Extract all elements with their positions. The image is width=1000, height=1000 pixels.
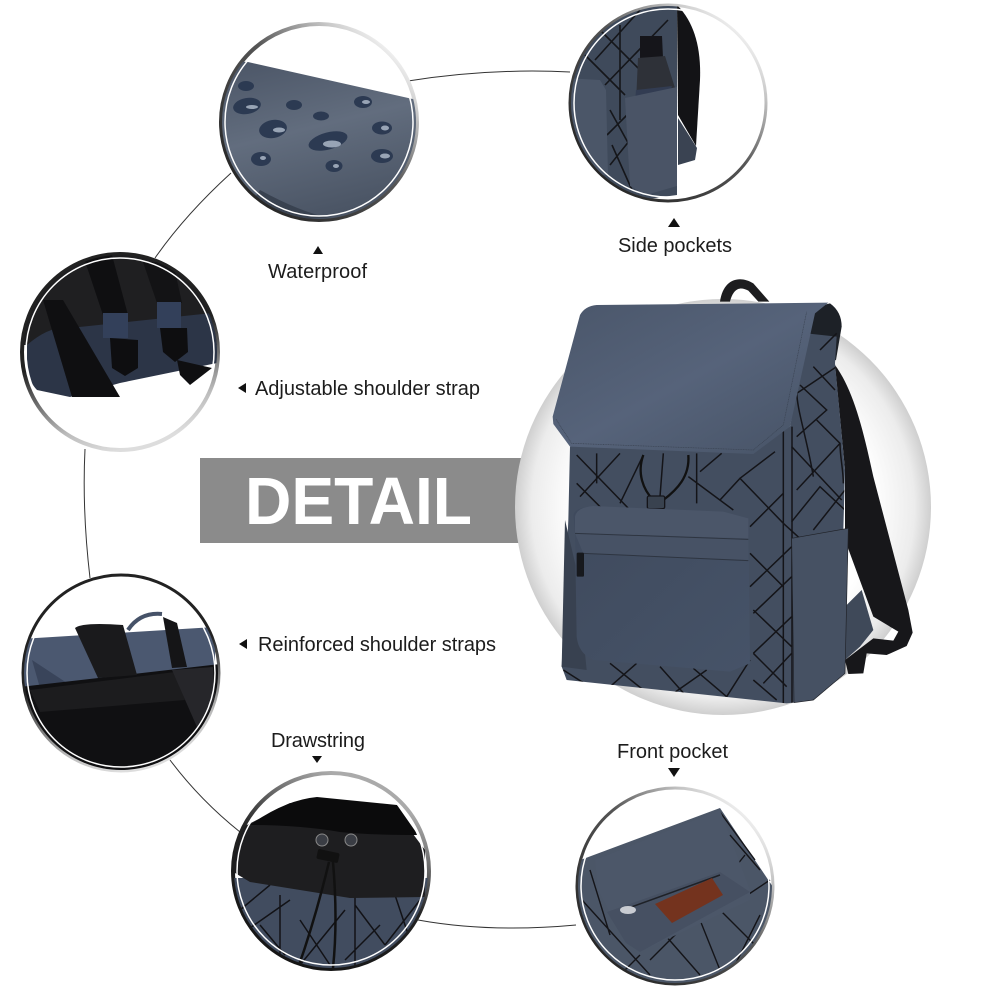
label: Front pocket: Front pocket: [617, 741, 728, 763]
cord lock: [647, 496, 665, 509]
buckles: [103, 313, 128, 338]
label: Reinforced shoulder straps: Reinforced shoulder straps: [258, 634, 496, 656]
wallet: [655, 878, 723, 923]
mesh collar: [230, 803, 425, 898]
top handle: [720, 279, 769, 302]
detail circle: waterproof: [210, 24, 417, 230]
backpack body: [562, 333, 845, 703]
connecting line: [84, 71, 576, 928]
front pocket: [562, 506, 750, 672]
detail circle: adjustable shoulder strap: [20, 250, 222, 450]
detail circle: side pockets: [560, 0, 766, 201]
label: Adjustable shoulder strap: Adjustable shoulder strap: [255, 378, 480, 400]
panel: main product circle backdrop: [515, 299, 931, 715]
loop handle: [128, 614, 162, 630]
umbrella: [640, 36, 663, 58]
label: Waterproof: [268, 246, 367, 283]
webbing strap: [75, 624, 137, 678]
label: Side pockets: [618, 218, 732, 257]
strap connector: [845, 590, 873, 660]
detail circle: front pocket: [575, 788, 775, 990]
banner: DETAIL: [200, 458, 530, 543]
left pocket: [571, 78, 608, 175]
zip pull: [620, 906, 636, 914]
detail circle: reinforced shoulder straps: [20, 575, 220, 780]
shoulder strap: [835, 365, 913, 674]
eyelets: [316, 834, 357, 846]
pocket pad: [666, 812, 750, 939]
side pocket: [792, 528, 848, 703]
geometric pattern: [562, 333, 845, 703]
black strap: [677, 5, 700, 146]
backpack interior: [807, 303, 842, 370]
label: Waterproof: Waterproof: [268, 261, 367, 283]
label: Drawstring: [271, 730, 365, 763]
flap stitching: [556, 312, 807, 450]
label: Drawstring: Drawstring: [271, 730, 365, 752]
cord lock and cords: [316, 849, 340, 863]
label: Front pocket: [617, 741, 728, 777]
side pocket panel: [625, 87, 677, 195]
detail circle: drawstring: [225, 773, 440, 975]
drawstring loop: [641, 455, 688, 500]
panel: main backpack illustration: [553, 279, 913, 703]
straps: [43, 300, 120, 397]
zipper pull: [577, 553, 584, 577]
water drops: [232, 81, 393, 172]
top flap: [553, 303, 828, 454]
label: Side pockets: Side pockets: [618, 235, 732, 257]
banner: DETAIL: DETAIL: [245, 464, 472, 539]
